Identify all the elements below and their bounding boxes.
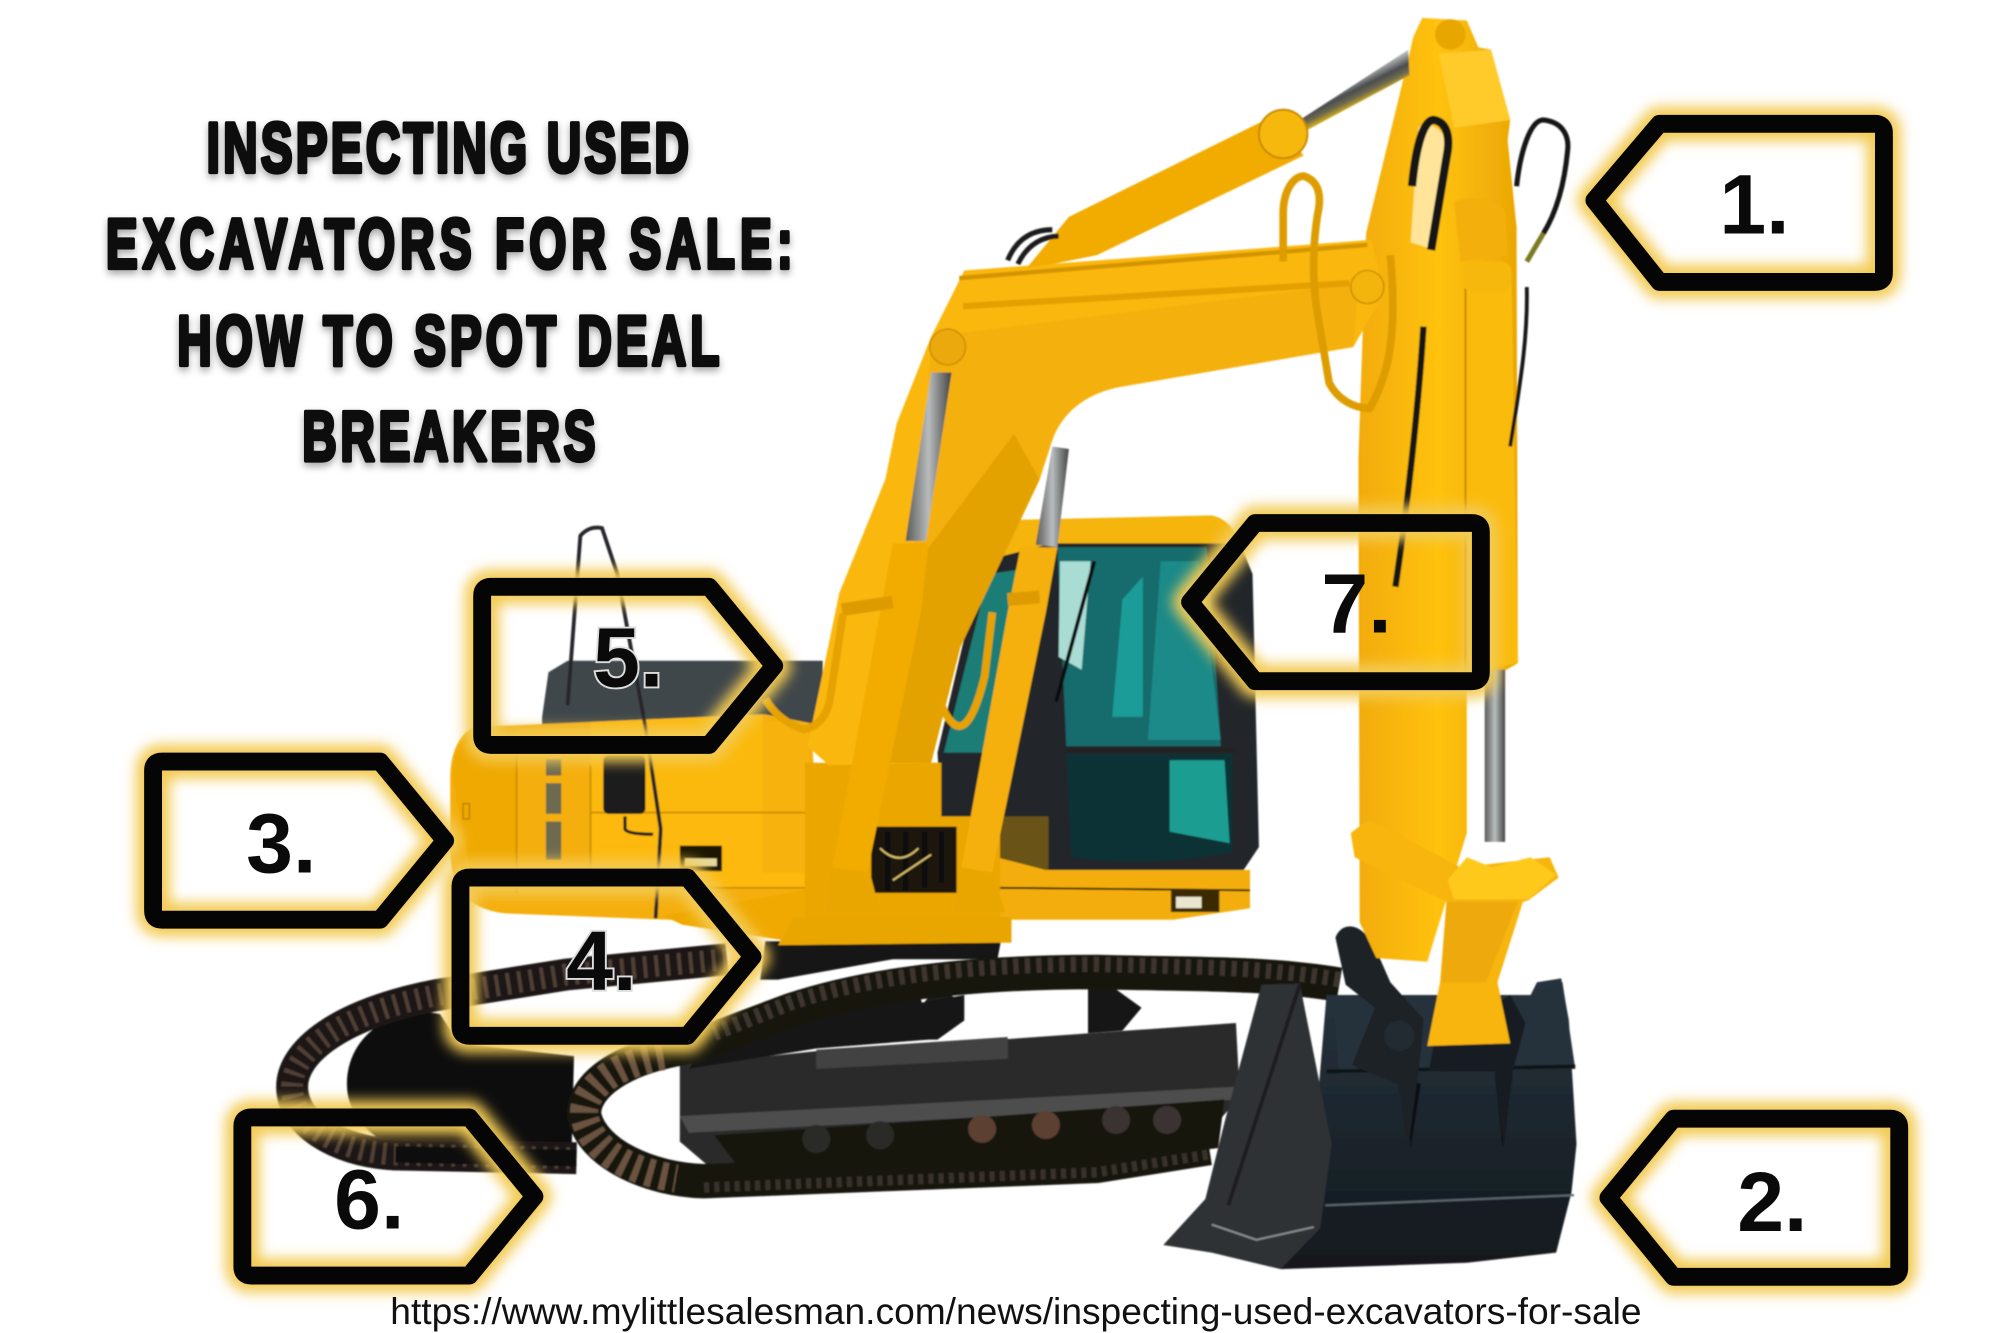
number 3: 3. bbox=[246, 796, 316, 890]
boom bbox=[807, 240, 1384, 765]
counterweight bbox=[542, 661, 823, 733]
number 2: 2. bbox=[1737, 1155, 1807, 1249]
title: EXCAVATORS FOR SALE: bbox=[106, 205, 793, 283]
tag 4 bbox=[460, 878, 753, 1036]
tag 1 bbox=[1594, 124, 1884, 282]
far crawler track bbox=[292, 959, 727, 1159]
title: INSPECTING USED bbox=[207, 109, 689, 187]
engine housing bbox=[450, 714, 842, 941]
number 6: 6. bbox=[334, 1152, 404, 1246]
tag 6 bbox=[242, 1117, 534, 1276]
title: HOW TO SPOT DEAL bbox=[177, 302, 719, 380]
number 1: 1. bbox=[1719, 157, 1790, 251]
upper body turret ring bbox=[760, 939, 1001, 980]
tag 2 bbox=[1608, 1119, 1899, 1277]
near crawler track bbox=[584, 964, 1339, 1188]
title: BREAKERS bbox=[302, 397, 595, 476]
excavator illustration bbox=[292, 18, 1577, 1269]
lower stick rod bbox=[1485, 670, 1505, 842]
bucket linkage bbox=[1351, 820, 1559, 1046]
tag 5 bbox=[482, 587, 774, 745]
number 7: 7. bbox=[1321, 557, 1392, 651]
turret block bbox=[778, 763, 1011, 945]
tag 7 bbox=[1190, 523, 1481, 681]
boom cylinders bbox=[765, 372, 1069, 912]
source url: https://www.mylittlesalesman.com/news/inspecting-used-excavators-for-sale bbox=[390, 1291, 1642, 1332]
stick arm bbox=[1358, 18, 1518, 962]
title bbox=[106, 109, 793, 476]
cab bbox=[938, 515, 1259, 920]
number 5: 5. bbox=[593, 610, 663, 704]
hoses bbox=[568, 120, 1568, 918]
number 4: 4. bbox=[566, 914, 637, 1008]
bucket bbox=[1163, 926, 1577, 1269]
stick cylinder bbox=[1008, 50, 1409, 268]
near crawler frame and rollers bbox=[680, 985, 1240, 1186]
tag 3 bbox=[153, 762, 445, 920]
